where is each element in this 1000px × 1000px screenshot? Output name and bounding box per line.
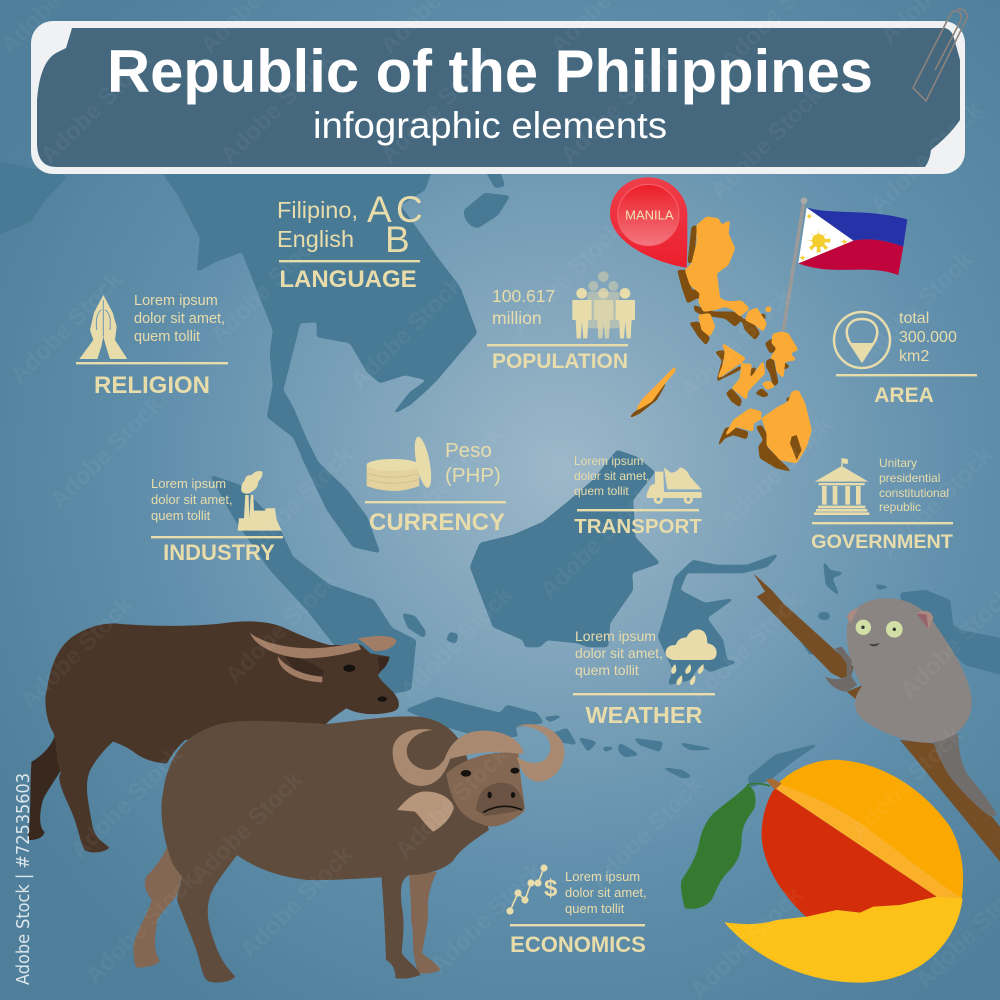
body text: quem tollit xyxy=(575,662,639,678)
text: Adobe Stock xyxy=(845,721,968,844)
text: Adobe Stock xyxy=(65,741,188,864)
heading: WEATHER xyxy=(585,702,703,728)
text: Adobe Stock xyxy=(715,411,838,534)
icon: coins xyxy=(367,436,434,491)
land: India corner xyxy=(0,160,68,238)
ear shadow xyxy=(285,657,324,677)
ear xyxy=(397,792,454,832)
text: Adobe Stock xyxy=(15,591,138,714)
orange half xyxy=(775,760,963,898)
middle branch xyxy=(847,685,863,700)
heading: CURRENCY xyxy=(369,509,505,536)
body text: dolor sit amet, xyxy=(575,645,663,661)
face details xyxy=(461,768,519,798)
text: Adobe Stock xyxy=(220,566,343,689)
banner panel xyxy=(37,28,960,167)
section: area xyxy=(834,310,977,407)
muzzle xyxy=(476,783,525,816)
Philippine flag xyxy=(783,197,907,331)
pin disc xyxy=(618,184,679,246)
lower branch xyxy=(900,740,1000,862)
section: transport xyxy=(574,454,702,538)
heading: GOVERNMENT xyxy=(811,531,953,553)
divider xyxy=(812,522,953,524)
far hind leg xyxy=(133,827,181,968)
heading: RELIGION xyxy=(94,372,210,399)
area text: 300.000 xyxy=(899,329,957,346)
text: Adobe Stock xyxy=(705,81,828,204)
text: Adobe Stock xyxy=(385,421,508,544)
land: Lesser Sunda islands xyxy=(543,715,720,778)
text: Adobe Stock xyxy=(865,96,988,219)
pin body xyxy=(610,177,687,268)
icon: dump truck xyxy=(647,467,702,504)
lower horn xyxy=(278,656,322,682)
text: Adobe Stock xyxy=(505,216,628,339)
land: Sumatra xyxy=(210,475,416,695)
body text: quem tollit xyxy=(151,508,211,523)
body text: quem tollit xyxy=(574,484,629,498)
pole xyxy=(783,201,804,331)
body text: dolor sit amet, xyxy=(565,885,647,900)
section: industry xyxy=(151,471,283,565)
ear xyxy=(378,657,390,672)
land: Timor xyxy=(748,743,820,788)
leaf xyxy=(681,785,756,909)
divider xyxy=(487,344,628,346)
stock credit: Adobe Stock | #72535603 xyxy=(14,773,34,985)
body text: Lorem ipsum xyxy=(565,869,640,884)
tail xyxy=(161,797,183,877)
body text: Lorem ipsum xyxy=(151,476,226,491)
letters ABC icon xyxy=(367,189,423,260)
divider xyxy=(279,260,420,262)
banner paper xyxy=(31,21,965,174)
text: Adobe Stock xyxy=(390,741,513,864)
body xyxy=(46,621,399,852)
header banner xyxy=(31,9,967,174)
text: Adobe Stock xyxy=(685,586,808,709)
icon: government building xyxy=(814,458,869,515)
left horn xyxy=(393,729,454,786)
text: Adobe Stock xyxy=(215,46,338,169)
body text: Lorem ipsum xyxy=(134,293,218,309)
ears xyxy=(917,611,933,629)
body text: constitutional xyxy=(879,486,949,500)
land: New Guinea xyxy=(900,590,1000,677)
section: government xyxy=(811,456,953,553)
upper branch xyxy=(753,573,853,678)
red half xyxy=(762,788,937,917)
body xyxy=(162,716,489,983)
red stripe xyxy=(798,239,903,275)
land: Indochina and Malay peninsula xyxy=(160,170,477,553)
text: Adobe Stock xyxy=(235,841,358,964)
text: Adobe Stock xyxy=(395,581,518,704)
map: Southeast Asia landmasses xyxy=(0,160,1000,788)
islands xyxy=(635,217,812,463)
body text: Lorem ipsum xyxy=(574,454,643,468)
body text: Lorem ipsum xyxy=(575,628,656,644)
text: Adobe Stock xyxy=(185,766,308,889)
inner shadow Mindanao xyxy=(790,435,802,460)
section: language xyxy=(277,189,423,293)
text: Adobe Stock xyxy=(235,441,358,564)
tarsier on branch xyxy=(753,573,1000,862)
heading: ECONOMICS xyxy=(510,932,646,957)
tail xyxy=(45,690,66,773)
far front leg xyxy=(409,872,441,974)
text: Adobe Stock xyxy=(375,46,498,169)
smile xyxy=(869,643,879,646)
language text: Filipino, xyxy=(277,197,358,223)
currency text: (PHP) xyxy=(445,464,501,487)
section: population xyxy=(487,271,635,373)
yellow slice xyxy=(724,897,963,983)
land: Java xyxy=(405,697,544,737)
icon: paperclip xyxy=(913,9,967,101)
leaf stalk xyxy=(747,784,770,786)
eye and nostril xyxy=(343,665,387,702)
heading: TRANSPORT xyxy=(574,515,702,538)
language text line 2: English xyxy=(277,226,354,252)
text: Adobe Stock xyxy=(675,281,798,404)
heading: AREA xyxy=(874,384,934,407)
white triangle xyxy=(798,208,853,263)
horn boss xyxy=(443,731,524,767)
area text: total xyxy=(899,310,929,327)
hand xyxy=(825,647,857,692)
text: Adobe Stock xyxy=(45,391,168,514)
area text: km2 xyxy=(899,348,929,365)
icon: dollar chart xyxy=(506,864,558,915)
head xyxy=(446,752,524,826)
tail xyxy=(933,733,997,817)
land: Sulawesi xyxy=(658,553,780,685)
section: currency xyxy=(365,436,506,536)
body text: Unitary xyxy=(879,456,917,470)
divider xyxy=(510,924,645,926)
letters ABC icon: B xyxy=(385,219,410,260)
subtitle: infographic elements xyxy=(313,105,667,146)
divider xyxy=(836,374,977,376)
body text: quem tollit xyxy=(565,901,625,916)
text: Adobe Stock xyxy=(875,441,998,564)
sun xyxy=(807,229,830,252)
text: Adobe Stock xyxy=(205,226,328,349)
divider xyxy=(573,693,715,695)
text: Adobe Stock xyxy=(345,271,468,394)
body text: republic xyxy=(879,500,921,514)
pin label: MANILA xyxy=(625,208,674,223)
text: Adobe Stock xyxy=(5,266,128,389)
mango xyxy=(681,760,963,983)
heading: LANGUAGE xyxy=(279,266,417,293)
body xyxy=(847,598,972,743)
land: Halmahera and Maluku xyxy=(800,560,892,655)
Manila location pin xyxy=(610,177,687,268)
water buffalo: dark xyxy=(28,621,399,852)
mouth xyxy=(483,806,522,812)
divider xyxy=(577,509,699,511)
divider xyxy=(151,536,283,538)
land: Borneo xyxy=(470,450,660,647)
icon: dollar chart: $ xyxy=(544,875,558,902)
pole knob xyxy=(801,197,807,204)
island shadows xyxy=(627,225,793,472)
right horn xyxy=(515,724,564,782)
currency text: Peso xyxy=(445,439,492,462)
text: Adobe Stock xyxy=(80,866,203,989)
section: economics xyxy=(506,864,647,957)
icon: people xyxy=(572,271,635,338)
text: Adobe Stock xyxy=(535,481,658,604)
divider xyxy=(365,501,506,503)
heading: POPULATION xyxy=(492,350,628,373)
heading: INDUSTRY xyxy=(163,540,275,565)
text: Adobe Stock xyxy=(555,46,678,169)
section: weather xyxy=(573,628,717,728)
text: Adobe Stock xyxy=(585,771,708,894)
body text: presidential xyxy=(879,471,940,485)
highlight band xyxy=(775,783,962,898)
figures: million xyxy=(492,308,542,328)
figures: 100.617 xyxy=(492,286,555,306)
stars xyxy=(799,213,848,261)
text: Adobe Stock xyxy=(855,246,978,369)
eyes xyxy=(856,620,871,635)
land: Hainan xyxy=(464,193,510,228)
blue stripe xyxy=(807,208,907,247)
section: religion xyxy=(76,293,228,399)
icon: rain cloud xyxy=(666,629,717,685)
right horn xyxy=(357,636,396,651)
stem xyxy=(766,778,782,790)
letters ABC icon: A xyxy=(367,189,392,230)
upper horn xyxy=(250,633,361,658)
title: Republic of the Philippines xyxy=(107,38,873,105)
far hind leg xyxy=(28,727,65,840)
icon: praying hands xyxy=(79,295,127,359)
icon: factory xyxy=(238,471,282,531)
divider xyxy=(76,362,228,364)
text: Adobe Stock xyxy=(425,856,548,979)
water buffalo: brown xyxy=(133,716,564,983)
land: northern sliver xyxy=(486,172,505,188)
map of the Philippines xyxy=(627,217,812,472)
body text: quem tollit xyxy=(134,329,200,345)
body text: dolor sit amet, xyxy=(574,469,649,483)
icon: location pin in circle xyxy=(834,312,890,368)
land: Bangka islands xyxy=(402,613,458,644)
text: Adobe Stock xyxy=(35,46,158,169)
body text: dolor sit amet, xyxy=(151,492,233,507)
letters ABC icon: C xyxy=(396,189,423,230)
body text: dolor sit amet, xyxy=(134,311,225,327)
